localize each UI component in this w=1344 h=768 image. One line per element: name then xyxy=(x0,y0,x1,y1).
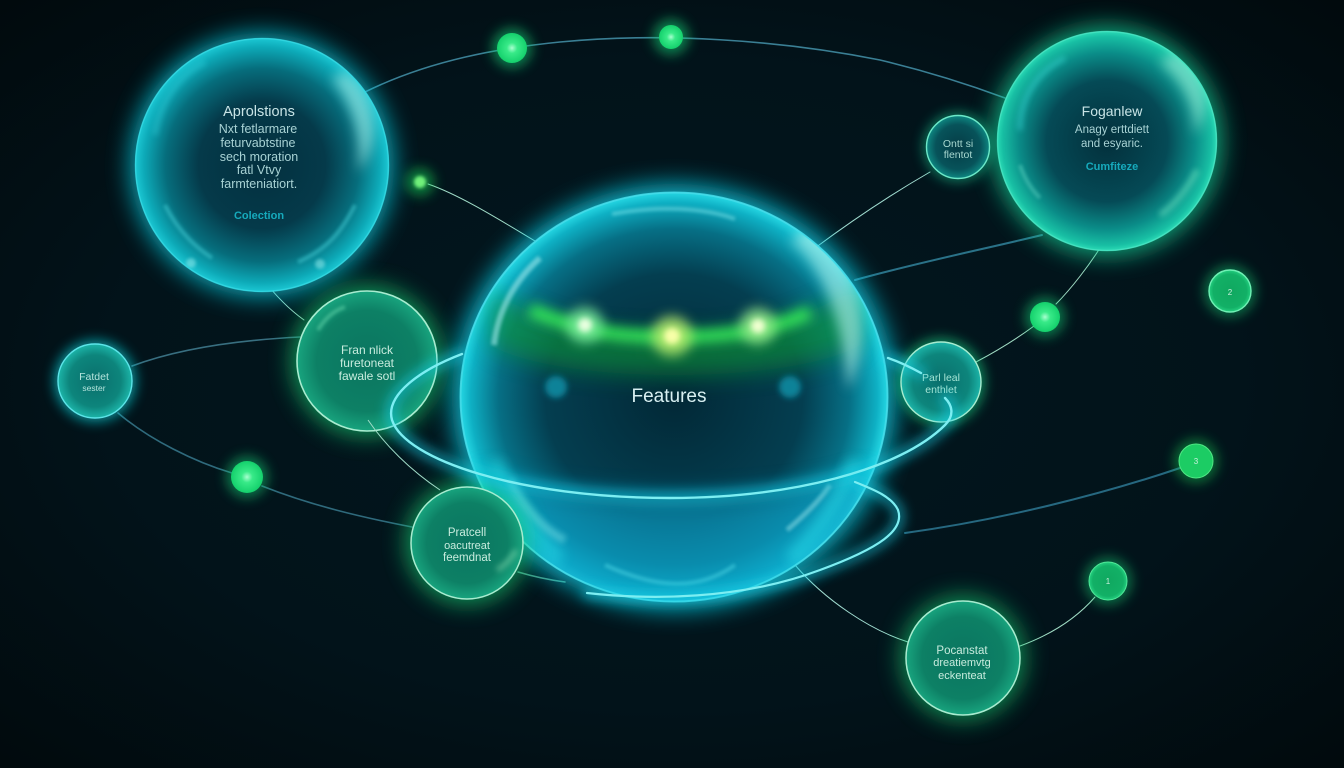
bubble: Foganlew: Anagy erttdiett xyxy=(1075,124,1150,136)
orbit ring lower xyxy=(587,482,899,597)
bubble: Ontt si xyxy=(923,112,993,182)
bubble: Parl leal: enthlet xyxy=(925,384,957,396)
bubble: Fatdet: sester xyxy=(82,383,106,393)
bubble: Fran nlick: furetoneat xyxy=(340,356,395,370)
bubble: Aprolstions: Nxt fetlarmare xyxy=(219,122,297,136)
bubble: Parl leal xyxy=(897,338,985,426)
node: number 3 xyxy=(1174,439,1218,483)
bubble: Pratcell: oacutreat xyxy=(444,540,490,552)
green light band xyxy=(490,285,860,375)
bubble: Foganlew xyxy=(992,26,1222,256)
central sphere xyxy=(452,184,896,612)
bubble: Pocanstat: eckenteat xyxy=(938,670,986,682)
bubble: Aprolstions xyxy=(130,33,394,297)
bubble: Pratcell: feemdnat xyxy=(443,552,492,564)
node: number 1: 1 xyxy=(1106,577,1111,586)
connector: Fran to Pratcell xyxy=(368,420,440,490)
side lights xyxy=(545,376,567,398)
node: number 3: 3 xyxy=(1194,457,1199,466)
bubble: Ontt si: flentot xyxy=(944,149,972,161)
bubble: Aprolstions: sech moration xyxy=(220,150,298,164)
bubble: Foganlew: Foganlew xyxy=(1082,103,1143,119)
connector lines xyxy=(118,38,1180,646)
node: number 2 xyxy=(1204,265,1256,317)
bubble: Aprolstions: farmteniatiort. xyxy=(221,177,297,191)
bubble: Fran nlick xyxy=(292,286,442,436)
node: top left xyxy=(492,28,532,68)
bubble: Ontt si: Ontt si xyxy=(943,138,973,150)
lower glow xyxy=(515,472,864,600)
node: lower left xyxy=(226,456,268,498)
bubble: Foganlew: Cumfiteze xyxy=(1086,161,1138,173)
bubble: Fran nlick: fawale sotl xyxy=(339,369,395,383)
bubble: Pratcell: Pratcell xyxy=(448,527,486,539)
bubble: Foganlew: and esyaric. xyxy=(1081,138,1143,150)
node: number 1 xyxy=(1084,557,1132,605)
bubble: Pocanstat xyxy=(901,596,1025,720)
bubble: Pratcell xyxy=(406,482,528,604)
node: number 2: 2 xyxy=(1228,288,1233,297)
node: top centre xyxy=(653,19,689,55)
node: small glow xyxy=(406,168,434,196)
node: right middle xyxy=(1025,297,1065,337)
bubble: Fran nlick: Fran nlick xyxy=(341,343,394,357)
bubble: Fatdet: Fatdet xyxy=(79,371,109,383)
bubble: Parl leal: Parl leal xyxy=(922,372,960,384)
central label: Features xyxy=(632,386,706,407)
glass highlights xyxy=(790,225,862,390)
bubble: Aprolstions: Aprolstions xyxy=(223,104,295,120)
bubble: Pocanstat: Pocanstat xyxy=(936,645,988,657)
bubble: Fatdet xyxy=(54,340,136,422)
bubble: Aprolstions: fatl Vtvy xyxy=(237,163,282,177)
bubble: Aprolstions: Colection xyxy=(234,210,284,222)
bubble: Pocanstat: dreatiemvtg xyxy=(933,657,991,669)
bubble: Aprolstions: feturvabtstine xyxy=(220,136,296,150)
orbit ring upper xyxy=(391,354,951,498)
